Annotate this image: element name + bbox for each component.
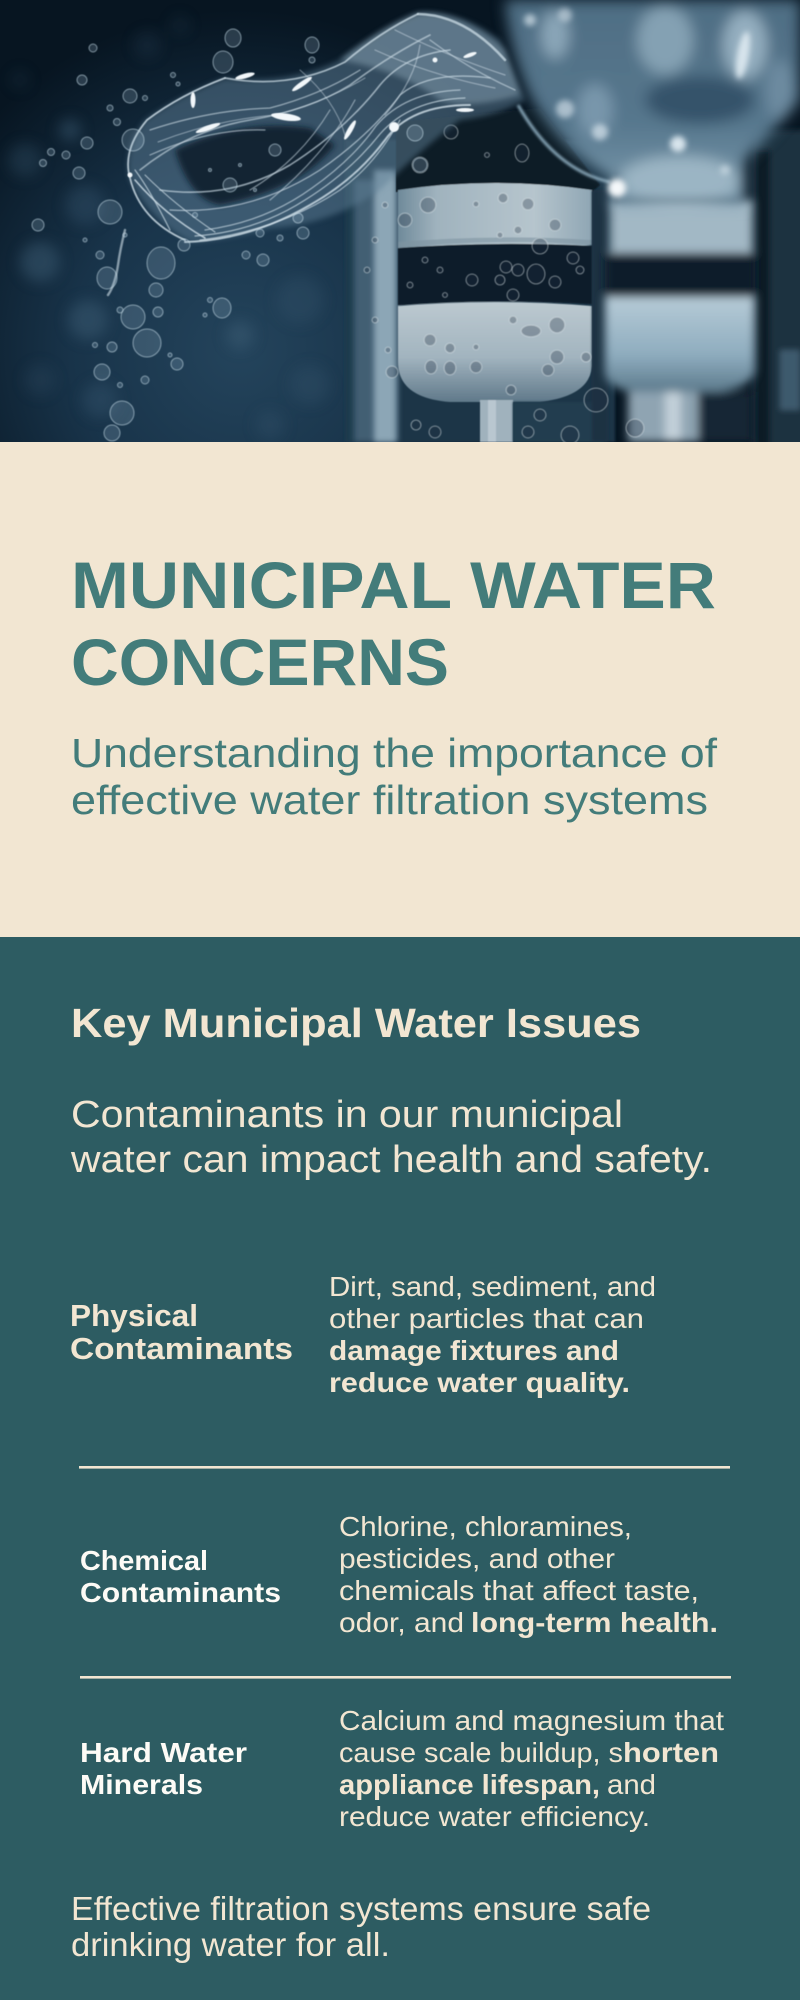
panel: title band	[0, 442, 800, 937]
row description: hard water minerals: cause scale buildup, s	[339, 1737, 623, 1768]
row description: hard water minerals: horten	[623, 1737, 719, 1768]
row label: hard water minerals: Minerals	[80, 1769, 203, 1800]
intro text	[70, 1094, 712, 1181]
row description: physical contaminants: other particles that can	[329, 1303, 644, 1334]
water splash stream	[108, 13, 525, 295]
panel: key municipal water issues	[0, 937, 800, 2000]
row description: chemical contaminants: pesticides, and other	[339, 1543, 615, 1574]
row label: chemical contaminants: Chemical	[80, 1545, 208, 1576]
row description: chemical contaminants: long-term health.	[471, 1607, 718, 1638]
droplets on front cartridge	[364, 125, 644, 444]
row label: physical contaminants	[70, 1298, 293, 1366]
title	[71, 548, 716, 699]
closing statement: Effective filtration systems ensure safe	[71, 1890, 651, 1927]
row label: physical contaminants: Physical	[70, 1298, 198, 1333]
intro text: water can impact health and safety.	[70, 1139, 712, 1181]
row description: chemical contaminants: odor, and	[339, 1607, 464, 1638]
row label: chemical contaminants	[80, 1545, 281, 1608]
row description: physical contaminants: reduce water quality.	[329, 1367, 630, 1398]
row description: hard water minerals: Calcium and magnesium that	[339, 1705, 724, 1736]
row description: physical contaminants	[329, 1271, 656, 1398]
subtitle: Understanding the importance of	[71, 730, 718, 776]
row description: chemical contaminants: Chlorine, chloramines,	[339, 1511, 632, 1542]
section heading: Key Municipal Water Issues	[71, 1000, 641, 1046]
row description: physical contaminants: Dirt, sand, sediment, and	[329, 1271, 656, 1302]
row description: chemical contaminants: chemicals that affect taste,	[339, 1575, 699, 1606]
filter cartridge: front	[345, 108, 615, 442]
row description: hard water minerals: and	[607, 1769, 656, 1800]
row description: chemical contaminants	[339, 1511, 718, 1638]
row label: physical contaminants: Contaminants	[70, 1331, 293, 1366]
far-right dark background	[752, 130, 800, 450]
rear bottle funnel	[505, 0, 800, 205]
intro text: Contaminants in our municipal	[71, 1094, 623, 1136]
panel: hero photograph of water splashing over filter cartridges	[0, 0, 800, 450]
funnel highlights	[524, 8, 753, 175]
title: MUNICIPAL WATER	[71, 548, 716, 622]
row description: physical contaminants: damage fixtures and	[329, 1335, 619, 1366]
row label: chemical contaminants: Contaminants	[80, 1577, 281, 1608]
background bokeh lights	[8, 36, 316, 426]
row: hard water minerals	[80, 1705, 724, 1832]
subtitle	[71, 730, 718, 823]
closing statement	[71, 1890, 651, 1963]
closing statement: drinking water for all.	[71, 1926, 390, 1963]
title: CONCERNS	[71, 625, 449, 699]
row label: hard water minerals: Hard Water	[80, 1737, 247, 1768]
water droplets	[32, 29, 427, 441]
subtitle: effective water filtration systems	[71, 777, 708, 823]
filter cartridge: rear blurred	[605, 200, 755, 442]
row label: hard water minerals	[80, 1737, 247, 1800]
row description: hard water minerals: reduce water efficiency.	[339, 1801, 650, 1832]
row: chemical contaminants	[80, 1511, 718, 1638]
row description: hard water minerals: appliance lifespan,	[339, 1769, 600, 1800]
row: physical contaminants	[70, 1271, 656, 1398]
row description: hard water minerals	[339, 1705, 724, 1832]
